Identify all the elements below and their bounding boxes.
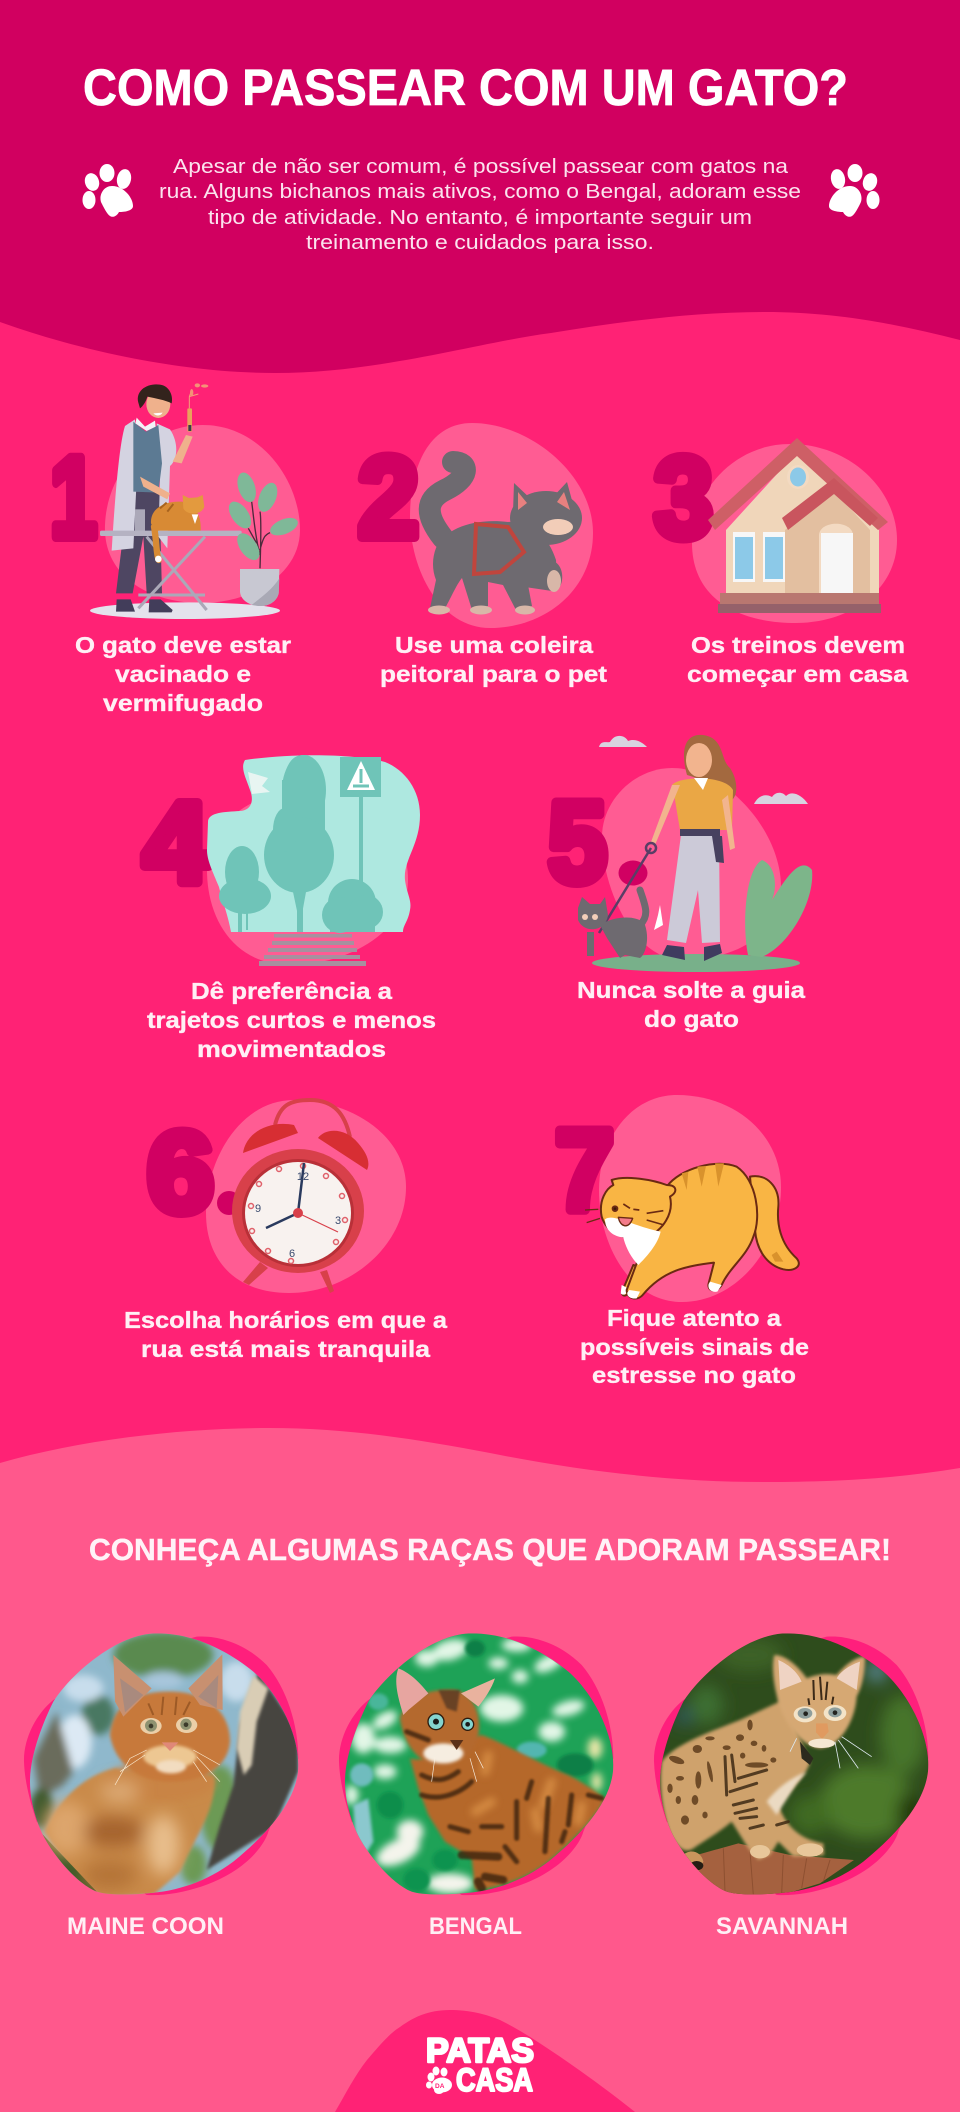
label: Maine Coon: MAINE COON	[67, 1913, 224, 1940]
intro text block: treinamento e cuidados para isso.	[306, 232, 654, 254]
step 1	[50, 383, 300, 716]
step 4 number: 4	[143, 779, 209, 907]
step 7 number: 7	[555, 1107, 614, 1235]
step 4	[143, 755, 436, 1062]
step 3 caption	[687, 632, 908, 687]
step 3	[654, 434, 908, 687]
step 2 caption	[380, 632, 607, 687]
panel: breeds section	[0, 1428, 960, 2112]
step 6	[124, 1100, 447, 1362]
icon: park scene with crossing	[207, 755, 420, 966]
step 5 caption	[577, 977, 805, 1032]
icon: alarm clock: 6	[289, 1248, 295, 1260]
intro text block: rua. Alguns bichanos mais ativos, como o Bengal, adoram esse	[159, 181, 801, 203]
step 2	[358, 423, 607, 687]
step 5 blob	[602, 768, 781, 960]
intro text block: Apesar de não ser comum, é possível passear com gatos na	[173, 156, 789, 178]
step 3 blob	[692, 444, 897, 623]
step 4 caption: trajetos curtos e menos	[147, 1007, 436, 1033]
icon: stressed orange cat	[585, 1163, 799, 1299]
step 7	[555, 1095, 809, 1388]
step 7 caption	[580, 1305, 809, 1388]
step 4 caption: movimentados	[197, 1036, 386, 1062]
step 1 caption: O gato deve estar	[75, 632, 291, 658]
step 1 number: 1	[50, 434, 97, 562]
step 1 blob	[105, 425, 300, 603]
step 3 caption: Os treinos devem	[691, 632, 905, 658]
step 7 caption: Fique atento a	[607, 1305, 781, 1331]
step 6 caption: Escolha horários em que a	[124, 1307, 447, 1333]
step 5 number: 5	[548, 779, 607, 907]
photo: Savannah	[654, 1633, 928, 1896]
logo hill	[335, 2010, 635, 2112]
step 2 caption: Use uma coleira	[395, 632, 593, 658]
step 5 number	[548, 779, 648, 907]
title: COMO PASSEAR COM UM GATO?	[83, 59, 848, 116]
breeds background wave	[0, 1428, 960, 2112]
step 6 number	[147, 1109, 241, 1237]
label: Bengal: BENGAL	[429, 1913, 522, 1940]
icon: alarm clock: 9	[255, 1203, 261, 1215]
step 6 blob	[206, 1100, 406, 1293]
step 5 caption: Nunca solte a guia	[577, 977, 805, 1003]
photo: Bengal	[335, 1625, 635, 1905]
label: Savannah: SAVANNAH	[716, 1913, 848, 1940]
icon: alarm clock: 3	[335, 1215, 341, 1227]
step 1 caption: vacinado e	[115, 661, 251, 687]
logo: Patas da Casa: CASA	[456, 2062, 533, 2098]
icon: left paw	[82, 164, 133, 217]
step 4 caption	[147, 978, 436, 1062]
icon: woman walking cat on leash	[578, 735, 812, 972]
intro text block	[159, 156, 801, 254]
step 7 caption: estresse no gato	[592, 1362, 796, 1388]
logo: Patas da Casa: PATAS	[426, 2032, 534, 2070]
step 2 blob	[410, 423, 593, 628]
icon: logo paw	[426, 2066, 452, 2094]
step 2 caption: peitoral para o pet	[380, 661, 607, 687]
step 1 caption	[75, 632, 291, 716]
logo: Patas da Casa	[426, 2032, 534, 2098]
step 3 caption: começar em casa	[687, 661, 908, 687]
step 7 caption: possíveis sinais de	[580, 1334, 809, 1360]
step 4 blob	[207, 790, 408, 965]
step 4 caption: Dê preferência a	[191, 978, 392, 1004]
step 2 number: 2	[358, 434, 419, 562]
icon: house	[708, 438, 888, 613]
icon: gray cat with harness	[428, 462, 582, 614]
breeds heading: CONHEÇA ALGUMAS RAÇAS QUE ADORAM PASSEAR!	[89, 1532, 891, 1567]
step 5 caption: do gato	[644, 1006, 739, 1032]
icon: right paw	[829, 164, 880, 217]
step 6 caption: rua está mais tranquila	[141, 1336, 430, 1362]
step 7 blob	[599, 1095, 781, 1302]
header band with wave	[0, 0, 960, 373]
step 6 caption	[124, 1307, 447, 1362]
icon: alarm clock	[232, 1100, 368, 1293]
step 5	[548, 735, 812, 1032]
icon: vet with cat on table	[90, 383, 300, 619]
step 3 number: 3	[654, 434, 713, 562]
photo: Maine Coon	[24, 1633, 298, 1896]
step 1 caption: vermifugado	[103, 690, 263, 716]
logo: Patas da Casa: DA	[435, 2083, 445, 2090]
step 6 number: 6	[147, 1109, 214, 1237]
icon: alarm clock: 12	[297, 1171, 309, 1183]
intro text block: tipo de atividade. No entanto, é importante seguir um	[208, 207, 752, 229]
